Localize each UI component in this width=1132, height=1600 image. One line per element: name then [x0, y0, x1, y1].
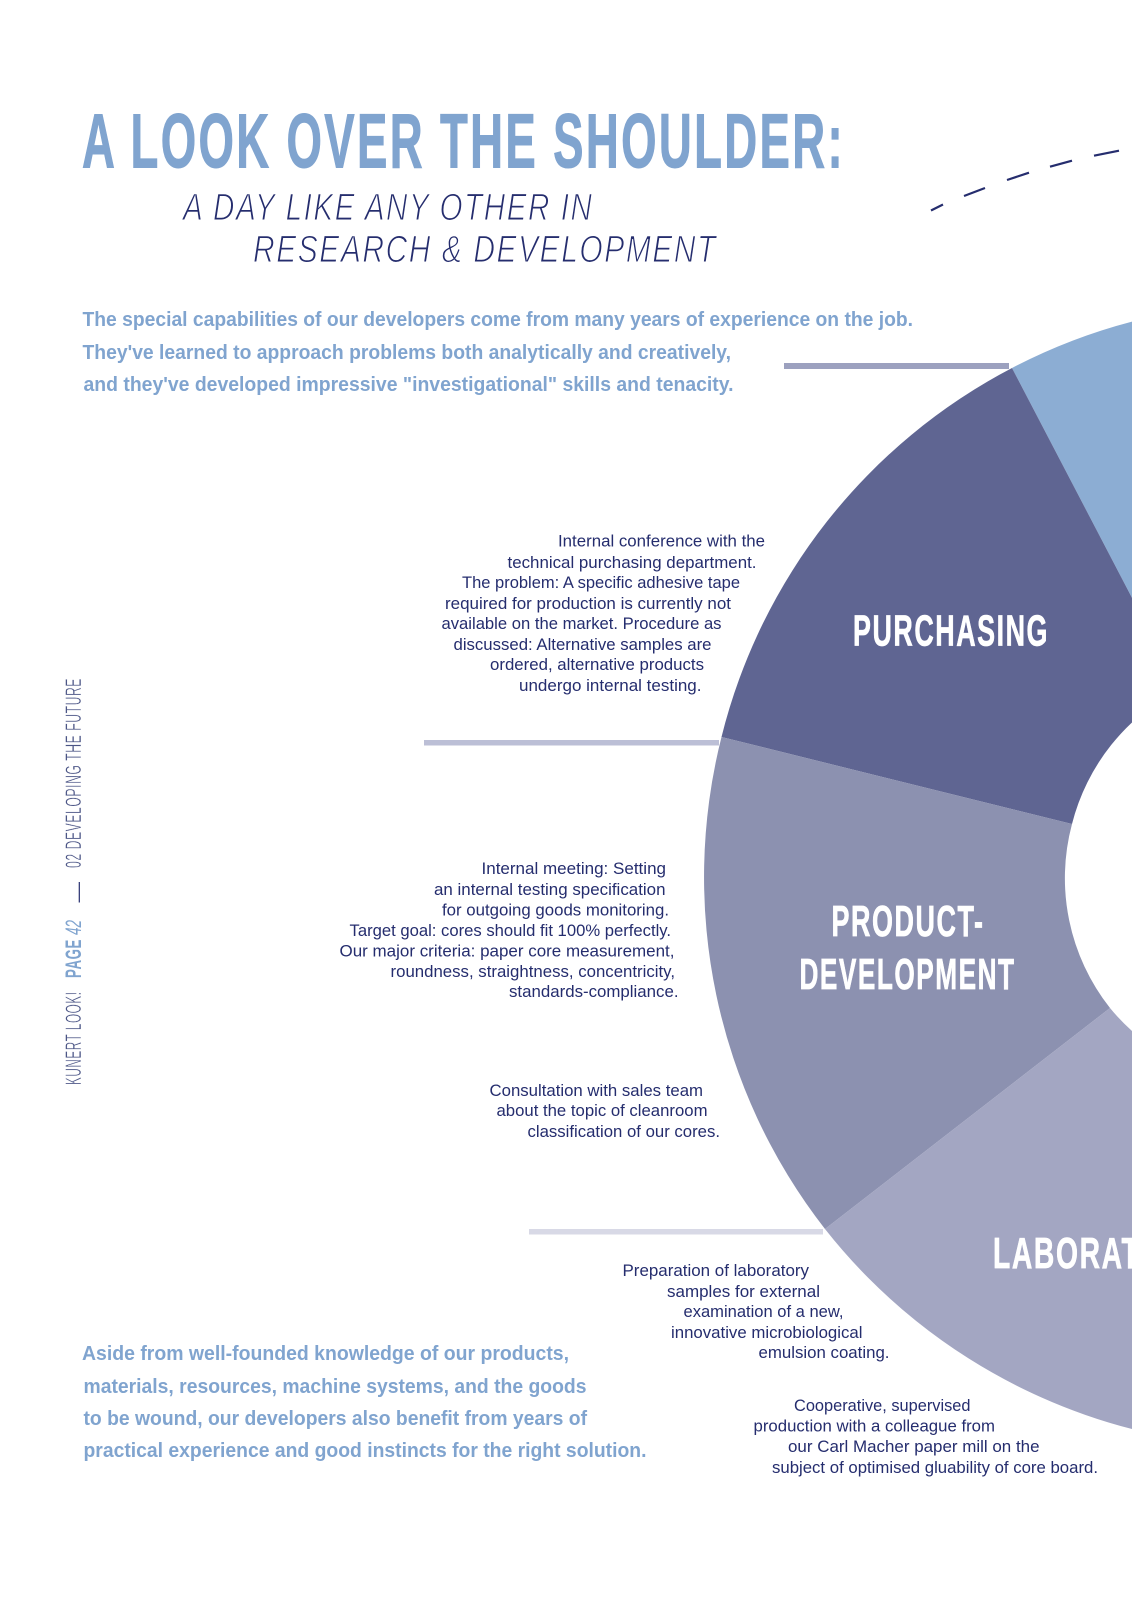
text block: sales consultation note [490, 1082, 720, 1141]
text block: testing specification note: Our major criteria: paper core measurement, [340, 942, 674, 960]
intro paragraph: and they've developed impressive "investigational" skills and tenacity. [84, 374, 734, 396]
closing paragraph: materials, resources, machine systems, and the goods [84, 1376, 586, 1398]
subtitle: A DAY LIKE ANY OTHER IN [181, 187, 594, 229]
closing paragraph: Aside from well-founded knowledge of our products, [82, 1343, 569, 1365]
vertical page footer: KUNERT LOOK! [61, 991, 86, 1085]
text block: paper mill note: our Carl Macher paper mill on the [788, 1438, 1040, 1456]
text block: laboratory samples note: examination of a new, [684, 1303, 844, 1321]
text block: sales consultation note: Consultation with sales team [490, 1082, 703, 1100]
text block: paper mill note: production with a colleague from [754, 1418, 995, 1436]
subtitle: RESEARCH & DEVELOPMENT [253, 229, 718, 271]
segment label: product development [800, 897, 1016, 999]
text block: purchasing note: The problem: A specific adhesive tape [462, 574, 740, 592]
text block: purchasing note [442, 532, 765, 695]
text block: laboratory samples note: Preparation of laboratory [622, 1262, 810, 1280]
text block: laboratory samples note: innovative microbiological [671, 1324, 862, 1342]
donut chart: process stages [704, 303, 1132, 1447]
closing paragraph: to be wound, our developers also benefit from years of [84, 1408, 587, 1430]
connector bar: top [784, 363, 1009, 369]
intro paragraph [82, 309, 913, 396]
text block: testing specification note: Internal meeting: Setting [482, 860, 666, 878]
connector bar: bottom [529, 1229, 823, 1234]
vertical page footer: 42 [61, 920, 86, 935]
vertical page footer: 02 DEVELOPING THE FUTURE [61, 678, 86, 868]
text block: laboratory samples note: emulsion coating. [758, 1344, 890, 1362]
text block: purchasing note: discussed: Alternative samples are [454, 636, 712, 654]
dashed arc [931, 151, 1119, 210]
text block: testing specification note: an internal testing specification [434, 881, 666, 899]
text block: testing specification note: standards-compliance. [509, 983, 678, 1001]
text block: purchasing note: Internal conference with the [558, 532, 765, 550]
segment label: product development: PRODUCT- [832, 897, 984, 946]
segment: laboratory [825, 1008, 1132, 1447]
text block: paper mill note: subject of optimised gluability of core board. [772, 1459, 1098, 1477]
text block: testing specification note [340, 860, 678, 1001]
text block: testing specification note: Target goal: cores should fit 100% perfectly. [350, 922, 671, 940]
segment: purchasing [722, 368, 1132, 824]
text block: paper mill note [754, 1397, 1098, 1477]
text block: testing specification note: for outgoing goods monitoring. [442, 902, 669, 920]
segment: product development [704, 737, 1110, 1229]
text block: laboratory samples note [622, 1262, 890, 1362]
intro paragraph: The special capabilities of our developers come from many years of experience on the job. [82, 309, 913, 331]
closing paragraph [82, 1343, 646, 1462]
text block: purchasing note: required for production is currently not [445, 595, 731, 613]
segment: light blue [1012, 303, 1132, 689]
subtitle [181, 187, 718, 271]
text block: paper mill note: Cooperative, supervised [794, 1397, 970, 1415]
text block: purchasing note: available on the market. Procedure as [442, 615, 722, 633]
vertical page footer: PAGE [61, 939, 86, 978]
closing paragraph: practical experience and good instincts for the right solution. [84, 1440, 646, 1462]
text block: purchasing note: ordered, alternative products [490, 656, 704, 674]
text block: laboratory samples note: samples for external [667, 1283, 820, 1301]
connector bar: middle [424, 740, 719, 746]
vertical page footer [61, 678, 86, 1085]
text block: testing specification note: roundness, straightness, concentricity, [390, 963, 675, 981]
text block: purchasing note: technical purchasing department. [508, 554, 756, 572]
text block: purchasing note: undergo internal testing. [519, 677, 702, 695]
text block: sales consultation note: classification of our cores. [528, 1123, 720, 1141]
intro paragraph: They've learned to approach problems both analytically and creatively, [82, 342, 731, 364]
text block: sales consultation note: about the topic of cleanroom [496, 1102, 708, 1120]
